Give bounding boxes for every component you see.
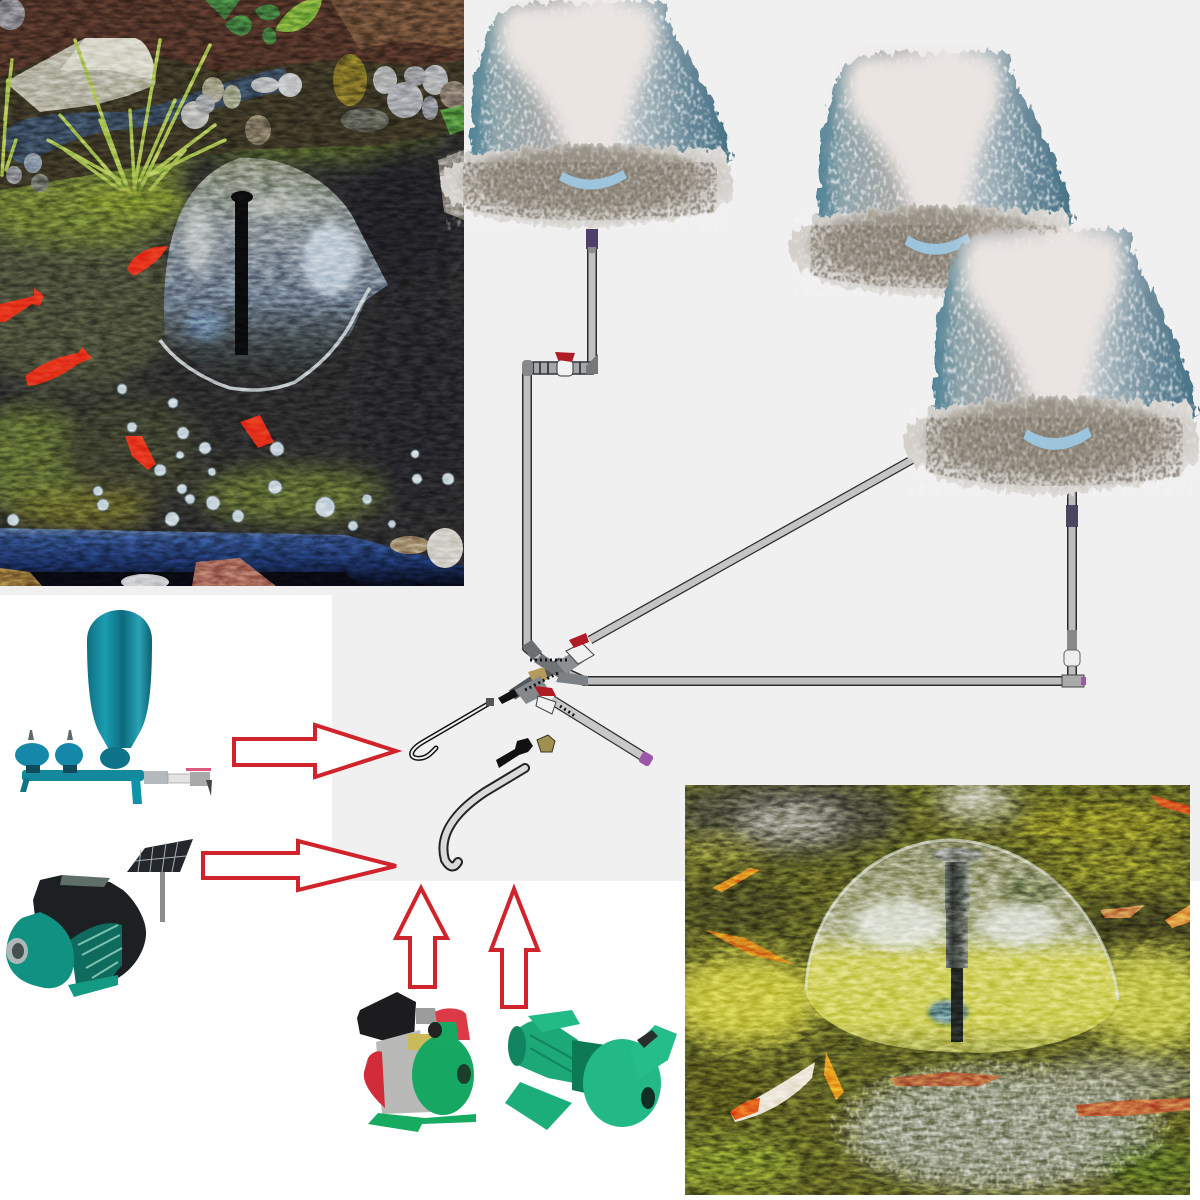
manifold pipe <box>22 770 144 781</box>
long horizontal pipe to right riser <box>556 480 1072 681</box>
arrow from centrifugal pump <box>491 889 538 1007</box>
arrow from engine pump <box>396 888 447 987</box>
brass adapter <box>537 735 555 752</box>
photo: garden pond with dome fountain and red fish <box>0 0 464 586</box>
photo: koi pond with glass dome fountain <box>685 785 1190 1195</box>
pipe to fountain 1 <box>527 238 592 668</box>
black fountain pipe <box>235 195 248 355</box>
water colour patches <box>660 775 1200 1191</box>
tank <box>87 610 152 748</box>
engine pump, green and red <box>357 992 476 1132</box>
nozzle top <box>231 191 253 203</box>
right riser fittings <box>1062 505 1086 687</box>
arrows <box>203 725 538 1007</box>
dark blue hose behind the plants <box>4 68 290 165</box>
fountain 3 <box>903 230 1200 497</box>
white backing bottom <box>0 881 685 1200</box>
mulch soil bank <box>0 0 464 78</box>
photo grain <box>685 785 1190 1195</box>
coupling under fountain 1 <box>586 229 598 253</box>
white panel behind the pumps <box>0 595 332 895</box>
grey pipe network <box>512 238 1072 757</box>
glass water dome <box>805 840 1118 1053</box>
fountain 1 <box>440 2 734 230</box>
steel fountain pipe <box>932 848 984 1042</box>
purple end cap <box>638 751 654 767</box>
solar panel on a pole <box>127 839 193 922</box>
legs <box>20 778 30 792</box>
arrow from solar pump <box>203 841 396 890</box>
pond water colour patches <box>0 114 480 528</box>
diagonal pipe to fountain 3 <box>590 458 915 640</box>
koi fish <box>705 795 1190 1122</box>
feed pipe to junction <box>512 662 562 695</box>
valve on fountain 1 pipe <box>522 352 598 376</box>
tank flange <box>100 747 130 769</box>
bubbling spray in front of the dome <box>830 1060 1170 1190</box>
curved hose <box>443 768 525 867</box>
moss below grass <box>80 188 180 212</box>
fountain 2 <box>788 52 1076 298</box>
manifold fittings at junction <box>498 633 594 716</box>
background: grey diagram panel <box>0 0 1200 881</box>
blue reflection at fountain base <box>928 1000 968 1024</box>
plants and stones at the bottom <box>0 528 463 590</box>
blue liner edge <box>0 528 464 586</box>
rocks <box>0 0 468 220</box>
outlet with valve <box>144 771 168 784</box>
moss clump <box>333 54 367 106</box>
red fish <box>0 246 274 470</box>
surface pump, teal and black <box>6 875 146 997</box>
water bubbles <box>7 384 454 531</box>
black hose barb <box>496 738 533 768</box>
centrifugal pump, green <box>505 1010 677 1130</box>
leafy plant at top <box>205 0 322 45</box>
small plant right <box>440 105 464 135</box>
twin air valves <box>15 730 83 773</box>
arrow from pressure tank <box>234 725 396 777</box>
small tube with hook <box>412 698 494 758</box>
shadowed ground behind stones <box>0 45 464 190</box>
glass water dome <box>160 158 388 390</box>
equipment: pressure tank with twin valves <box>15 610 212 804</box>
photo grain <box>0 0 464 586</box>
grass plant <box>2 40 225 195</box>
drain pipe <box>552 700 644 757</box>
